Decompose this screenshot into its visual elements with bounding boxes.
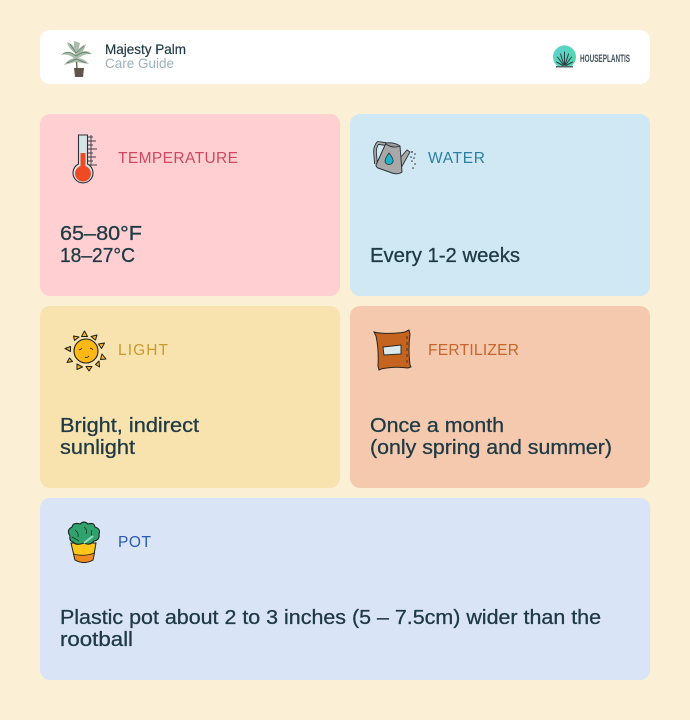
icon: potted plant [68,522,100,562]
text: pot size: Plastic pot about 2 to 3 inches (5 – 7.5cm) wider than the [60,607,601,629]
label: LIGHT [118,342,169,359]
text: light needs: sunlight [60,437,135,459]
panel: light [40,306,340,488]
logo: Houseplantis [553,45,630,67]
text: feeding schedule [370,415,612,459]
panel: fertilizer [350,306,650,488]
text: watering frequency: Every 1-2 weeks [370,245,520,267]
subtitle: Care Guide [105,55,174,71]
title: Majesty Palm [105,41,186,57]
icon: fertilizer bag [374,330,411,370]
label: TEMPERATURE [118,150,238,167]
label: FERTILIZER [428,342,519,359]
panel: pot [40,498,650,680]
text: pot size [60,607,601,651]
icon: thermometer [73,135,97,183]
panel: temperature [40,114,340,296]
text: feeding schedule: (only spring and summer) [370,437,612,459]
text: temperature range [60,223,142,267]
label: WATER [428,150,485,167]
icon: potted palm [61,41,92,77]
text: temperature range: 18–27°C [60,245,135,267]
text: light needs: Bright, indirect [60,415,199,437]
text: temperature range: 65–80°F [60,223,142,245]
icon: watering can [375,143,416,174]
label: POT [118,534,152,551]
icon: sun [65,331,106,371]
text: light needs [60,415,199,459]
panel: water [350,114,650,296]
text: pot size: rootball [60,629,133,651]
text: feeding schedule: Once a month [370,415,504,437]
header bar [40,30,650,84]
logo: Houseplantis: HOUSEPLANTIS [580,53,630,65]
